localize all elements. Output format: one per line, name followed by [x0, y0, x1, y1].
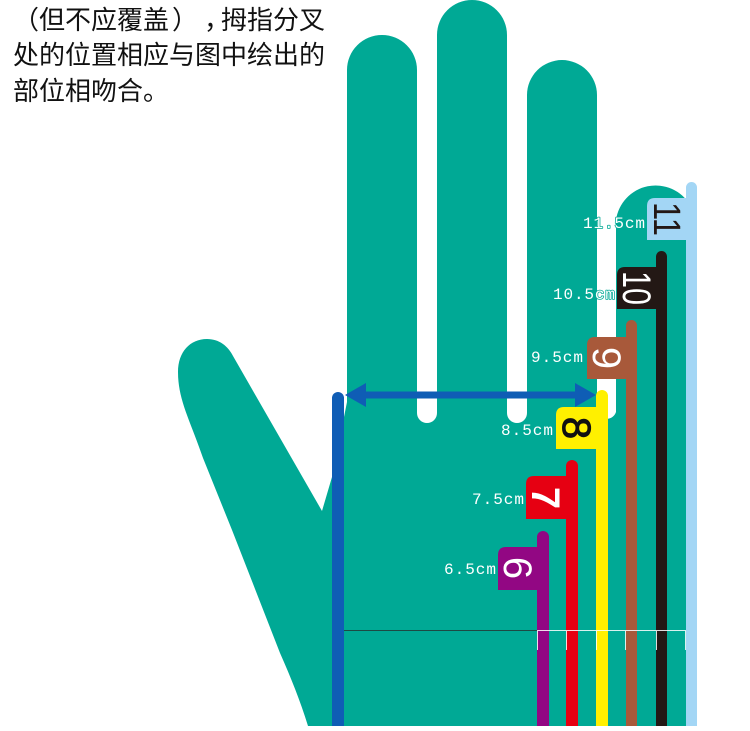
instruction text: 部位相吻合。	[13, 76, 169, 106]
white tick ruler across the strips	[538, 630, 686, 650]
size 8 marker: yellow	[554, 390, 608, 726]
blue left measuring bar	[332, 392, 344, 726]
hand-size centimetre labels: 8.5cm	[501, 422, 553, 440]
hand-size centimetre labels: 11.5cm	[583, 215, 645, 233]
hand-size centimetre labels	[444, 215, 645, 579]
size 10 marker: black	[614, 251, 667, 726]
size 9 marker: brown	[584, 320, 637, 726]
size 9 marker: brown: 9	[584, 347, 628, 369]
size 6 marker: purple: 6	[495, 557, 539, 579]
size 11 marker: light blue: 11	[645, 202, 687, 236]
instruction text	[13, 5, 325, 106]
measuring baseline	[344, 630, 537, 631]
size 10 marker: black: 10	[614, 271, 658, 305]
instruction text: （但不应覆盖），拇指分叉	[13, 5, 325, 35]
hand-size centimetre labels: 6.5cm	[444, 561, 496, 579]
hand-size centimetre labels: 9.5cm	[531, 349, 583, 367]
size 6 marker: purple	[495, 531, 549, 726]
blue double-headed width arrow	[345, 383, 596, 407]
hand-size centimetre labels: 10.5cm	[553, 286, 615, 304]
size 8 marker: yellow: 8	[554, 417, 598, 439]
icon: green glove hand silhouette	[178, 0, 690, 726]
hand-size centimetre labels: 7.5cm	[472, 491, 524, 509]
instruction text: 处的位置相应与图中绘出的	[13, 40, 325, 70]
size 7 marker: red	[523, 460, 578, 726]
size 7 marker: red: 7	[523, 487, 567, 509]
size 11 marker: light blue	[645, 182, 697, 726]
